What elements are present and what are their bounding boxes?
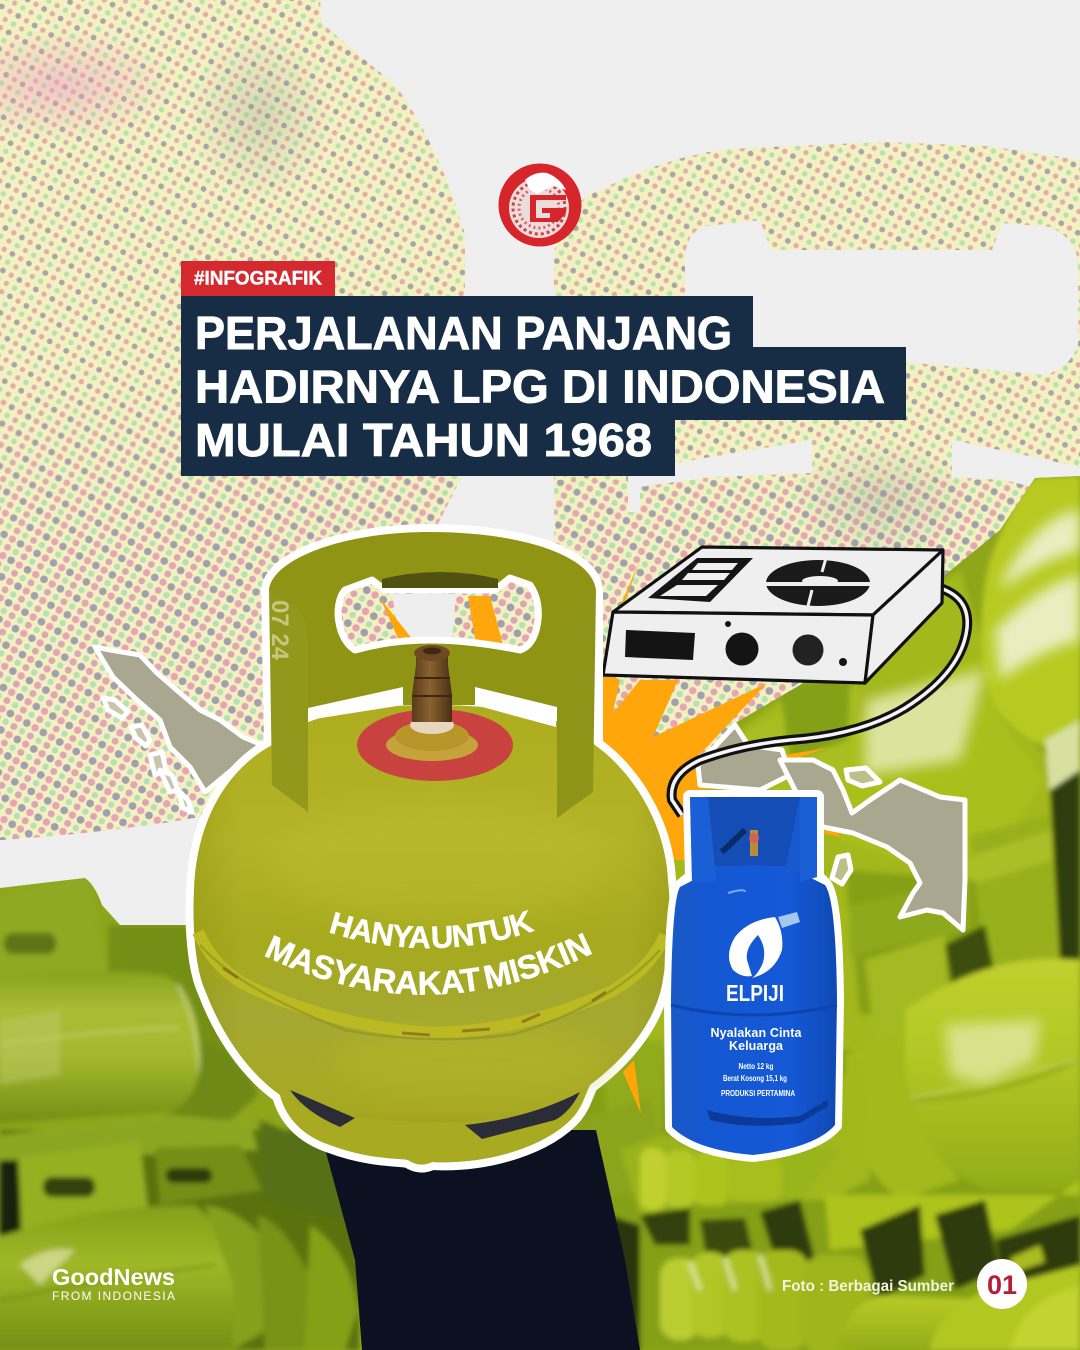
footer brand: GoodNews from Indonesia [52,1264,175,1303]
blue cylinder outline [671,797,837,1155]
seam and foot [671,1005,837,1015]
blue valve [722,830,759,856]
label text: Nyalakan Cinta [710,1026,803,1040]
background photo: rows of green 3 kg LPG cylinders [0,476,1080,1350]
back of the collar [269,532,596,708]
right rows of cylinders [580,476,1080,1350]
title block: MULAI TAHUN 1968 [195,414,652,466]
cylinder body [193,705,670,1165]
collar date stamp: 07 24 [266,600,293,661]
orange burst [590,560,840,1114]
publisher logo: red eagle G emblem [498,164,582,246]
label text: PRODUKSI PERTAMINA [721,1089,795,1098]
hashtag label: #INFOGRAFIK [194,268,322,290]
label text: Berat Kosong 15,1 kg [723,1074,787,1083]
red valve seat [357,709,513,781]
page number badge [977,1259,1027,1309]
label text: Keluarga [729,1039,784,1053]
main illustration: green 3 kg LPG cylinder [186,524,676,1173]
icon: vintage electric stove with cable [603,547,967,815]
cylinder white outline [193,532,670,1165]
brass valve [386,645,478,761]
stove cable [672,588,967,815]
label text: ELPIJI [726,980,784,1006]
blue collar [690,797,817,880]
stove body [603,547,943,683]
logo: ELPIJI flame [729,917,782,978]
blue cylinder body [671,865,837,1155]
footer brand: GoodNews from Indonesia: GoodNews [52,1264,175,1290]
title block: PERJALANAN PANJANG [195,307,732,359]
seam band [198,932,665,1033]
label text [710,980,803,1098]
stove vent [648,558,753,602]
collar front plates [269,590,308,812]
photo credit: Foto : Berbagai Sumber [782,1278,954,1295]
blue 12 kg ELPIJI cylinder [671,797,837,1155]
bottom ring of the cylinder [280,1085,590,1165]
rust marks [223,968,606,1035]
map of Indonesia: Sumatra [95,647,262,812]
blue collar front [690,797,817,882]
label text: Netto 12 kg [738,1062,774,1071]
halftone background: gas cylinder silhouette [0,0,1080,840]
map of Indonesia: Kalimantan, Sulawesi and Papua [698,725,965,930]
footer brand: GoodNews from Indonesia: FROM INDONESIA [52,1289,175,1303]
title block: HADIRNYA LPG DI INDONESIA [195,360,885,412]
cylinder caption: MASYARAKAT MISKIN [264,932,592,995]
stove burner [764,558,872,606]
person in dark clothes behind the main cylinder [320,1130,640,1350]
left rows of cylinders [0,879,390,1350]
hashtag label [181,261,335,296]
title block [181,296,906,476]
cylinder caption: HANYA UNTUK [330,910,535,948]
collar handle opening [338,572,538,650]
lower pale bands of the silhouette [628,440,1080,512]
white openings under the collar [308,687,556,727]
page number badge: 01 [987,1270,1017,1300]
stove panel and knobs [625,621,847,666]
